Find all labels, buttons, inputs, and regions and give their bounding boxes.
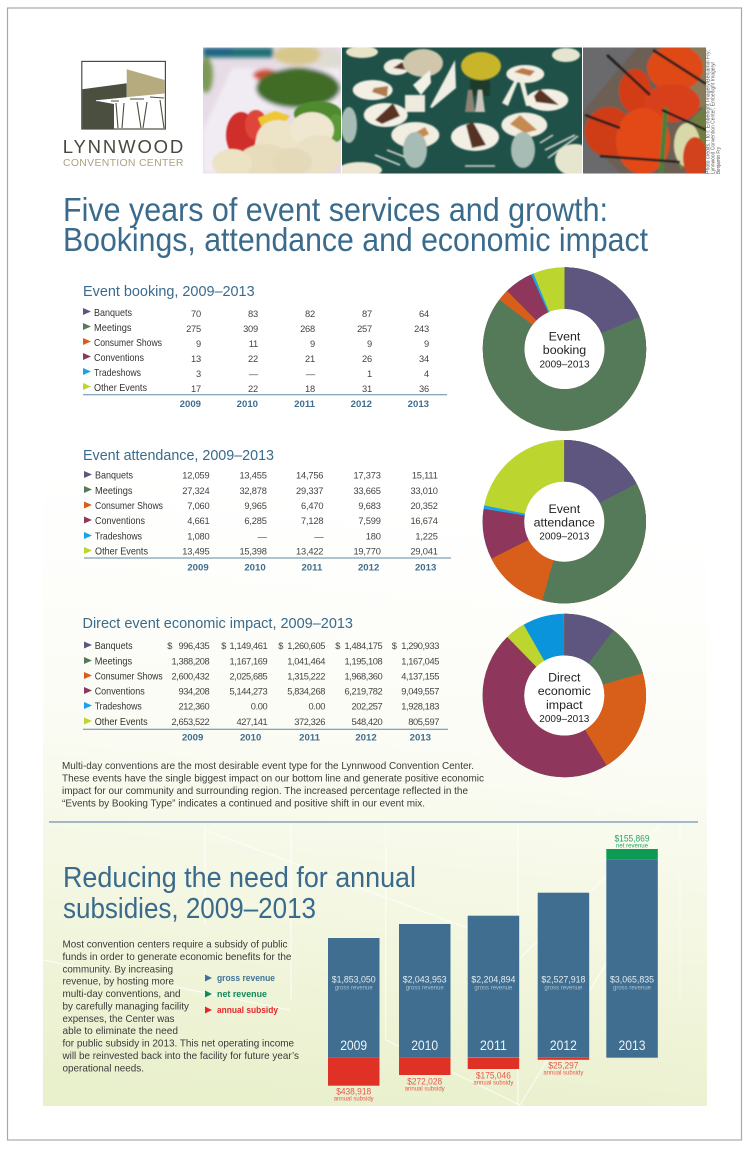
donut label: event booking: Event (549, 330, 581, 344)
row: meetings: 275 (186, 324, 201, 334)
bar: 2010: $2,043,953 (403, 974, 447, 984)
row: banquets: 1,149,461 (230, 641, 268, 651)
legend (205, 973, 278, 1015)
row: banquets: $ (335, 641, 341, 651)
row: banquets: $ (392, 641, 398, 651)
year labels: 2012 (355, 733, 377, 744)
bar: 2012: $2,527,918 (541, 974, 585, 984)
row: other events: 372,326 (294, 717, 325, 727)
bar: 2013 (606, 832, 658, 1058)
row: consumer shows: 1,968,360 (345, 672, 383, 682)
photo: vegetable platter (199, 45, 344, 177)
row: consumer shows: Consumer Shows (94, 338, 162, 349)
row: banquets: 70 (191, 309, 201, 319)
paragraph: subsidy explanation: multi-day conventions, and (62, 989, 181, 1000)
row: banquets: $ (221, 641, 227, 651)
year labels: 2013 (415, 562, 436, 573)
row: tradeshows (84, 532, 438, 542)
paragraph: subsidy explanation: expenses, the Center was (62, 1014, 174, 1025)
row: other events: 15,398 (239, 546, 267, 556)
row: tradeshows: 4 (424, 369, 429, 379)
paragraph: multi-day conventions: “Events by Booking Type” indicates a continued and positive shift in our event mix. (62, 798, 425, 810)
paragraph: subsidy explanation: Most convention centers require a subsidy of public (62, 940, 288, 950)
row: conventions: 9,049,557 (401, 687, 439, 697)
row: meetings: 27,324 (182, 486, 210, 496)
year labels: 2010 (240, 733, 261, 744)
row: banquets: Banquets (95, 641, 133, 652)
paragraph: subsidy explanation: operational needs. (62, 1063, 144, 1074)
heading: event attendance: Event attendance, 2009–2013 (83, 447, 274, 464)
row: meetings (83, 323, 429, 334)
bar: 2012: 2012 (550, 1038, 577, 1053)
row: other events: 13,495 (182, 546, 210, 556)
row: other events: 13,422 (296, 546, 323, 556)
row: banquets (83, 308, 429, 319)
paragraph: multi-day conventions: These events have the single biggest impact on our bottom line and generate positive economic (62, 774, 484, 784)
donut label: event attendance: Event (548, 502, 581, 516)
photo credit (706, 50, 722, 174)
row: conventions: 7,599 (358, 516, 381, 526)
paragraph: subsidy explanation: revenue, by hosting more (62, 977, 174, 988)
row: other events: 17 (191, 384, 201, 394)
row: consumer shows: 9 (310, 339, 315, 349)
table: event booking (83, 283, 447, 410)
row: banquets: 15,111 (412, 470, 438, 480)
year labels: 2011 (299, 733, 321, 744)
row: other events (83, 383, 429, 394)
row: banquets (84, 641, 439, 652)
bar: 2009: $438,918 (336, 1086, 371, 1096)
bar: 2013: gross revenue (613, 984, 651, 992)
logo mark (82, 61, 165, 129)
row: other events: Other Events (95, 546, 148, 558)
row: other events: 548,420 (351, 717, 383, 727)
bar: 2011: $2,204,894 (471, 974, 515, 984)
row: other events: Other Events (94, 383, 147, 394)
bar: 2010: $272,028 (407, 1076, 442, 1086)
row: tradeshows: — (314, 532, 324, 542)
background gradient panel (43, 430, 707, 1106)
row: consumer shows: 4,137,155 (401, 672, 439, 682)
photo: banquet table (342, 48, 582, 174)
heading: reducing subsidies: Reducing the need for annual (63, 862, 416, 894)
row: other events: 22 (248, 384, 258, 394)
row: tradeshows: 1,080 (187, 532, 210, 542)
logo (63, 61, 184, 169)
row: consumer shows (84, 672, 439, 683)
year labels: 2012 (358, 562, 379, 573)
row: consumer shows: 9 (367, 339, 372, 349)
row: meetings (84, 486, 438, 497)
row: conventions: 5,144,273 (230, 687, 268, 697)
paragraph: subsidy explanation: able to eliminate the need (62, 1026, 178, 1037)
row: consumer shows: 1,315,222 (287, 672, 325, 682)
legend: gross revenue: gross revenue (217, 973, 275, 983)
year labels: 2009 (187, 562, 209, 573)
bar: 2009: $1,853,050 (332, 974, 376, 984)
row: other events: 29,041 (410, 546, 438, 556)
paragraph: subsidy explanation: will be reinvested back into the facility for future year’s (62, 1051, 299, 1062)
bar chart (328, 832, 658, 1102)
row: tradeshows: 1 (367, 369, 372, 379)
row: tradeshows: 1,928,183 (401, 702, 439, 712)
row: meetings: Meetings (94, 323, 132, 334)
row: consumer shows: Consumer Shows (95, 672, 163, 683)
year labels (182, 733, 431, 744)
row: tradeshows: 180 (366, 532, 381, 542)
year labels: 2011 (294, 399, 316, 410)
paragraph: subsidy explanation: by carefully managing facility (62, 1001, 190, 1012)
row: other events: 805,597 (408, 717, 439, 727)
row: tradeshows: 3 (196, 369, 201, 379)
paragraph: multi-day conventions: Multi-day conventions are the most desirable event type for the Lynnwood Convention Center. (62, 761, 474, 772)
row: meetings: 1,041,464 (287, 657, 325, 667)
donut label: direct economic impact: Direct (548, 670, 581, 684)
row: tradeshows: Tradeshows (95, 702, 142, 713)
row: conventions: 13 (191, 354, 201, 364)
bar: 2012: annual subsidy (543, 1070, 584, 1076)
row: meetings: 1,167,169 (230, 657, 268, 667)
donut label: event booking (539, 330, 590, 370)
row: conventions (83, 353, 429, 364)
row: tradeshows: — (306, 369, 316, 379)
row: other events: 36 (419, 384, 429, 394)
row: banquets: $ (167, 641, 173, 651)
year labels: 2010 (244, 562, 266, 573)
row: meetings: 33,010 (410, 486, 438, 496)
row: banquets: 13,455 (239, 470, 267, 480)
paragraph: multi-day conventions (62, 761, 484, 810)
bar: 2011: $175,046 (476, 1070, 511, 1080)
row: conventions: 34 (419, 354, 429, 364)
row: conventions: 6,219,782 (345, 687, 383, 697)
row: meetings: 243 (414, 324, 429, 334)
row: other events (84, 717, 439, 728)
row: other events: Other Events (95, 717, 148, 728)
paragraph: subsidy explanation: for public subsidy in 2013. This net operating income (62, 1038, 294, 1050)
row: tradeshows (84, 702, 439, 713)
row: conventions: 4,661 (187, 516, 210, 526)
year labels: 2012 (351, 399, 372, 410)
row: tradeshows: 212,360 (178, 702, 210, 712)
year labels (187, 562, 436, 573)
bar: 2013: net revenue (616, 842, 648, 850)
heading: direct economic impact: Direct event economic impact, 2009–2013 (82, 615, 353, 632)
row: meetings: Meetings (95, 657, 132, 668)
bar: 2009: gross revenue (335, 984, 373, 992)
bar: 2013: $3,065,835 (610, 974, 654, 984)
paragraph: subsidy explanation (62, 940, 299, 1074)
donut label: event booking: booking (543, 343, 586, 357)
row: meetings: 33,665 (353, 486, 381, 496)
bar: 2011: 2011 (480, 1038, 507, 1053)
donut label: event attendance (534, 502, 595, 542)
row: other events: 18 (305, 384, 315, 394)
heading: reducing subsidies (63, 862, 416, 925)
year labels: 2011 (301, 562, 323, 573)
row: conventions: 934,208 (178, 687, 210, 697)
donut label: event attendance: attendance (534, 515, 595, 529)
row: consumer shows: Consumer Shows (95, 501, 163, 512)
row: conventions: 7,128 (301, 516, 323, 526)
row: banquets: 1,290,933 (401, 641, 439, 651)
row: conventions: 5,834,268 (287, 687, 325, 697)
year labels: 2013 (410, 733, 431, 744)
row: conventions (84, 516, 438, 527)
donut: event booking (504, 288, 625, 410)
row: meetings: 268 (300, 324, 315, 334)
paragraph: subsidy explanation: community. By increasing (62, 964, 173, 975)
row: consumer shows: 9,683 (358, 501, 381, 511)
donut: direct economic impact (503, 635, 625, 756)
row: conventions (84, 687, 439, 698)
row: tradeshows: 202,257 (351, 702, 383, 712)
bar: 2010: gross revenue (406, 984, 444, 992)
row: banquets: 996,435 (178, 641, 210, 651)
year labels: 2009 (180, 399, 201, 410)
table: direct economic impact (82, 615, 448, 744)
row: conventions: 22 (248, 354, 258, 364)
row: other events (84, 546, 438, 558)
bar: 2013: $155,869 (614, 832, 650, 844)
photo credit: Benjamin Fry (716, 147, 722, 174)
row: other events: 19,770 (353, 546, 381, 556)
title: Bookings, attendance and economic impact (63, 221, 648, 258)
bar: 2010 (399, 924, 450, 1092)
row: tradeshows: 1,225 (415, 532, 438, 542)
table: event attendance (83, 447, 451, 573)
row: tradeshows: Tradeshows (94, 368, 141, 379)
row: banquets: 87 (362, 309, 372, 319)
row: consumer shows: 6,470 (301, 501, 323, 511)
row: tradeshows: — (258, 532, 268, 542)
row: banquets: Banquets (95, 470, 133, 482)
row: banquets: 1,484,175 (345, 641, 383, 651)
donut label: event booking: 2009–2013 (539, 360, 590, 370)
logo subtitle: CONVENTION CENTER (63, 157, 184, 169)
paragraph: subsidy explanation: funds in order to generate economic benefits for the (62, 952, 292, 963)
row: meetings: 32,878 (239, 486, 267, 496)
bar: 2009: annual subsidy (334, 1096, 374, 1102)
photo credit: Lynnwood Convention Center; Emberlight Imagery/ (711, 61, 717, 174)
row: meetings: Meetings (95, 486, 132, 497)
row: consumer shows: 2,025,685 (230, 672, 268, 682)
row: banquets: 1,260,605 (287, 641, 325, 651)
bar: 2011: gross revenue (474, 984, 513, 992)
row: tradeshows: Tradeshows (95, 532, 142, 542)
row: other events: 2,653,522 (172, 717, 210, 727)
row: meetings: 257 (357, 324, 372, 334)
donut label: direct economic impact: impact (546, 698, 583, 712)
row: other events: 31 (362, 384, 372, 394)
row: conventions: Conventions (94, 353, 144, 364)
row: banquets: Banquets (94, 308, 132, 319)
donut label: direct economic impact: 2009–2013 (539, 714, 590, 725)
row: banquets (84, 470, 438, 482)
legend: net revenue: net revenue (217, 989, 267, 999)
row: tradeshows: — (249, 369, 259, 379)
donut label: direct economic impact (538, 670, 591, 725)
row: banquets: 83 (248, 309, 258, 319)
bar: 2009: 2009 (340, 1038, 367, 1053)
row: tradeshows: 0.00 (308, 702, 325, 712)
row: conventions: Conventions (95, 516, 145, 527)
paragraph: multi-day conventions: impact for our community and surrounding region. The increased percentage reflected in the (62, 786, 468, 797)
row: consumer shows: 9 (196, 339, 201, 349)
title: Five years of event services and growth: (63, 191, 608, 228)
row: consumer shows (84, 501, 438, 512)
bar: 2011: annual subsidy (473, 1080, 514, 1086)
row: consumer shows: 2,600,432 (172, 672, 210, 682)
year labels: 2010 (237, 399, 258, 410)
bar: 2011 (468, 916, 519, 1086)
row: meetings: 1,388,208 (172, 657, 210, 667)
row: meetings (84, 657, 439, 668)
year labels (180, 399, 429, 410)
row: other events: 427,141 (236, 717, 268, 727)
year labels: 2013 (408, 399, 429, 410)
bar: 2012: gross revenue (544, 984, 583, 992)
row: meetings: 309 (243, 324, 258, 334)
bar: 2013: 2013 (618, 1038, 646, 1053)
row: conventions: 6,285 (244, 516, 267, 526)
bar: 2009 (328, 938, 380, 1102)
row: banquets: 64 (419, 309, 429, 319)
legend: annual subsidy: annual subsidy (217, 1005, 278, 1015)
row: consumer shows: 11 (249, 339, 258, 349)
bar: 2012 (538, 893, 589, 1076)
bar: 2010: annual subsidy (405, 1086, 445, 1092)
row: conventions: 21 (305, 354, 315, 364)
row: conventions: Conventions (95, 687, 145, 698)
row: banquets: 12,059 (182, 470, 210, 480)
donut label: event attendance: 2009–2013 (539, 531, 590, 542)
row: banquets: $ (278, 641, 284, 651)
row: banquets: 17,373 (353, 470, 381, 480)
title (63, 191, 648, 258)
heading: reducing subsidies: subsidies, 2009–2013 (63, 893, 316, 925)
year labels: 2009 (182, 733, 203, 744)
row: consumer shows: 9 (424, 339, 429, 349)
row: banquets: 14,756 (296, 470, 323, 480)
bar: 2010: 2010 (411, 1038, 438, 1053)
photo credit: Photo credits, l to r: Emberlight Imagery/Benjamin Fry; (706, 50, 712, 174)
row: conventions: 26 (362, 354, 372, 364)
row: meetings: 1,167,045 (401, 657, 439, 667)
row: consumer shows (83, 338, 429, 349)
row: meetings: 1,195,108 (345, 657, 383, 667)
row: banquets: 82 (305, 309, 315, 319)
donut: event attendance (503, 461, 625, 583)
logo wordmark: LYNNWOOD (63, 136, 183, 157)
donut label: direct economic impact: economic (538, 684, 591, 698)
row: consumer shows: 7,060 (187, 501, 210, 511)
row: tradeshows: 0.00 (251, 702, 268, 712)
photo: tomatoes (583, 45, 707, 179)
row: tradeshows (83, 368, 429, 379)
bar: 2012: $25,297 (548, 1060, 578, 1070)
row: conventions: 16,674 (410, 516, 438, 526)
row: consumer shows: 9,965 (244, 501, 267, 511)
row: meetings: 29,337 (296, 486, 323, 496)
row: consumer shows: 20,352 (410, 501, 438, 511)
heading: event booking: Event booking, 2009–2013 (83, 283, 255, 300)
